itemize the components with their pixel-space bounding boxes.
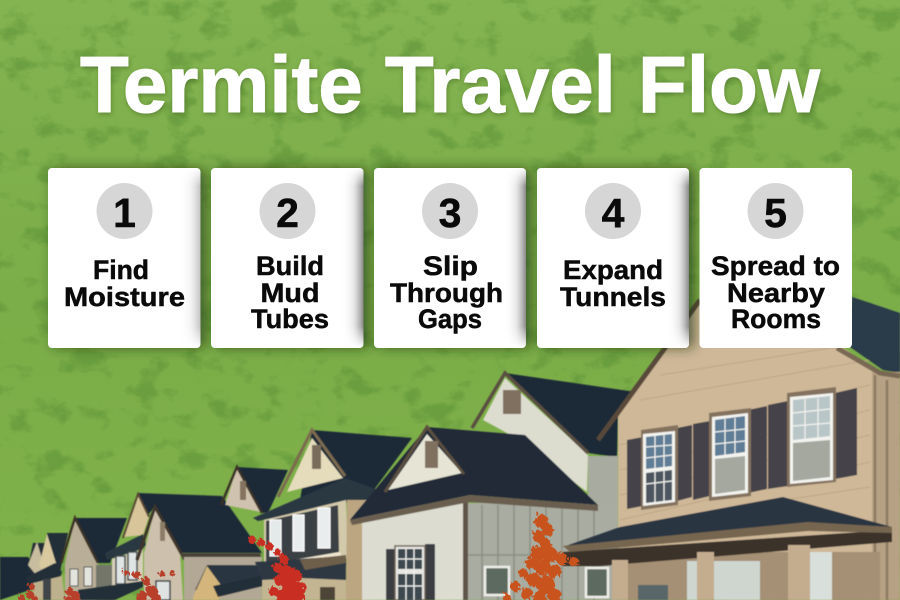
card 5: Spread to Nearby Rooms: 5 [764,190,787,236]
card 5: Spread to Nearby Rooms: Spread to [711,251,840,281]
card 1: Find Moisture: 1 [113,190,136,236]
upper windows [641,387,836,510]
title: Termite Travel Flow [80,40,821,129]
card 2: Build Mud Tubes: 2 [276,190,299,236]
card 3: Slip Through Gaps: Through [390,278,503,308]
row of far houses, left side [0,533,68,600]
tree: orange maple in front of grey house [501,513,577,600]
card 4: Expand Tunnels [537,168,689,348]
card 1: Find Moisture: Moisture [64,282,185,312]
card 2: Build Mud Tubes: Build [256,251,324,281]
card 3: Slip Through Gaps [374,168,526,348]
porch walls and columns [620,552,880,600]
card 3: Slip Through Gaps: 3 [439,190,461,236]
card 2: Build Mud Tubes: Tubes [251,304,329,334]
card 4: Expand Tunnels: Expand [563,255,663,285]
card 5: Spread to Nearby Rooms [700,168,852,348]
card 3: Slip Through Gaps: Gaps [418,304,482,334]
house with tan gable and long roof [78,493,262,600]
card 4: Expand Tunnels: 4 [602,190,625,236]
house with small back gable [221,467,288,513]
house with grey board-and-batten wall [350,373,636,600]
card 2: Build Mud Tubes: Mud [260,278,320,308]
tree: red maple by middle house [246,534,305,600]
card 5: Spread to Nearby Rooms: Rooms [731,304,821,334]
large tan house in front [563,296,900,600]
house with cream gable and shuttered upper windows [253,430,412,600]
card 1: Find Moisture: Find [93,255,149,285]
card 3: Slip Through Gaps: Slip [423,251,478,281]
house with beige gable and small porch [137,507,346,600]
card 1: Find Moisture [48,168,200,348]
tree: small red maples at lower left [16,568,173,600]
card 5: Spread to Nearby Rooms: Nearby [727,278,825,308]
card 4: Expand Tunnels: Tunnels [560,282,666,312]
house with grey gable [61,518,127,600]
shutters [627,388,857,509]
card 2: Build Mud Tubes [211,168,364,348]
